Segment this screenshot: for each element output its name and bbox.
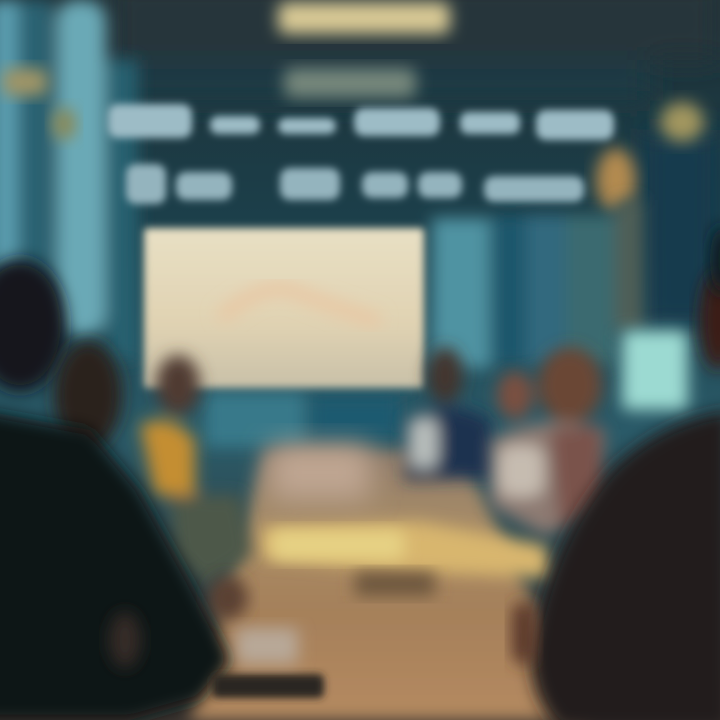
heading line 2 <box>126 164 584 204</box>
foreground lower sleeve highlight <box>109 612 141 668</box>
light: right pendant lamp <box>660 102 704 142</box>
person: dark foreground silhouette left <box>0 259 324 720</box>
right foreground arm highlight <box>512 602 536 664</box>
blurred wall heading <box>108 104 614 204</box>
ceiling <box>110 0 720 330</box>
light: left small lamp <box>52 108 76 140</box>
bright laptop screen right <box>622 330 688 410</box>
left blue columns <box>0 0 138 360</box>
person: yellow shirt seated left <box>140 355 252 585</box>
light: right wall glow <box>596 148 636 212</box>
whiteboard presentation screen <box>144 228 424 388</box>
heading line 1 <box>108 104 614 140</box>
dark object on table <box>212 674 324 698</box>
light: main ceiling panel <box>278 2 450 34</box>
person: group on right <box>490 347 605 535</box>
right figure head <box>700 270 720 370</box>
table yellow papers <box>272 530 404 560</box>
pale paper by elbow <box>236 628 298 664</box>
foreground hand and sleeve <box>208 576 248 620</box>
ceiling lights <box>2 2 704 212</box>
person: dark foreground silhouette right <box>512 226 720 720</box>
teal curtains on right <box>432 200 643 368</box>
light: left wall lamp <box>2 68 48 96</box>
table upper glare <box>270 445 370 500</box>
person: navy suit centre right <box>405 347 498 480</box>
table highlight <box>262 522 552 578</box>
whiteboard chart lines <box>220 289 380 322</box>
table shadow <box>355 572 435 596</box>
conference table <box>190 445 590 720</box>
right figure hair <box>710 226 720 294</box>
lower wall band <box>205 392 400 447</box>
light: secondary ceiling panel <box>284 68 416 98</box>
